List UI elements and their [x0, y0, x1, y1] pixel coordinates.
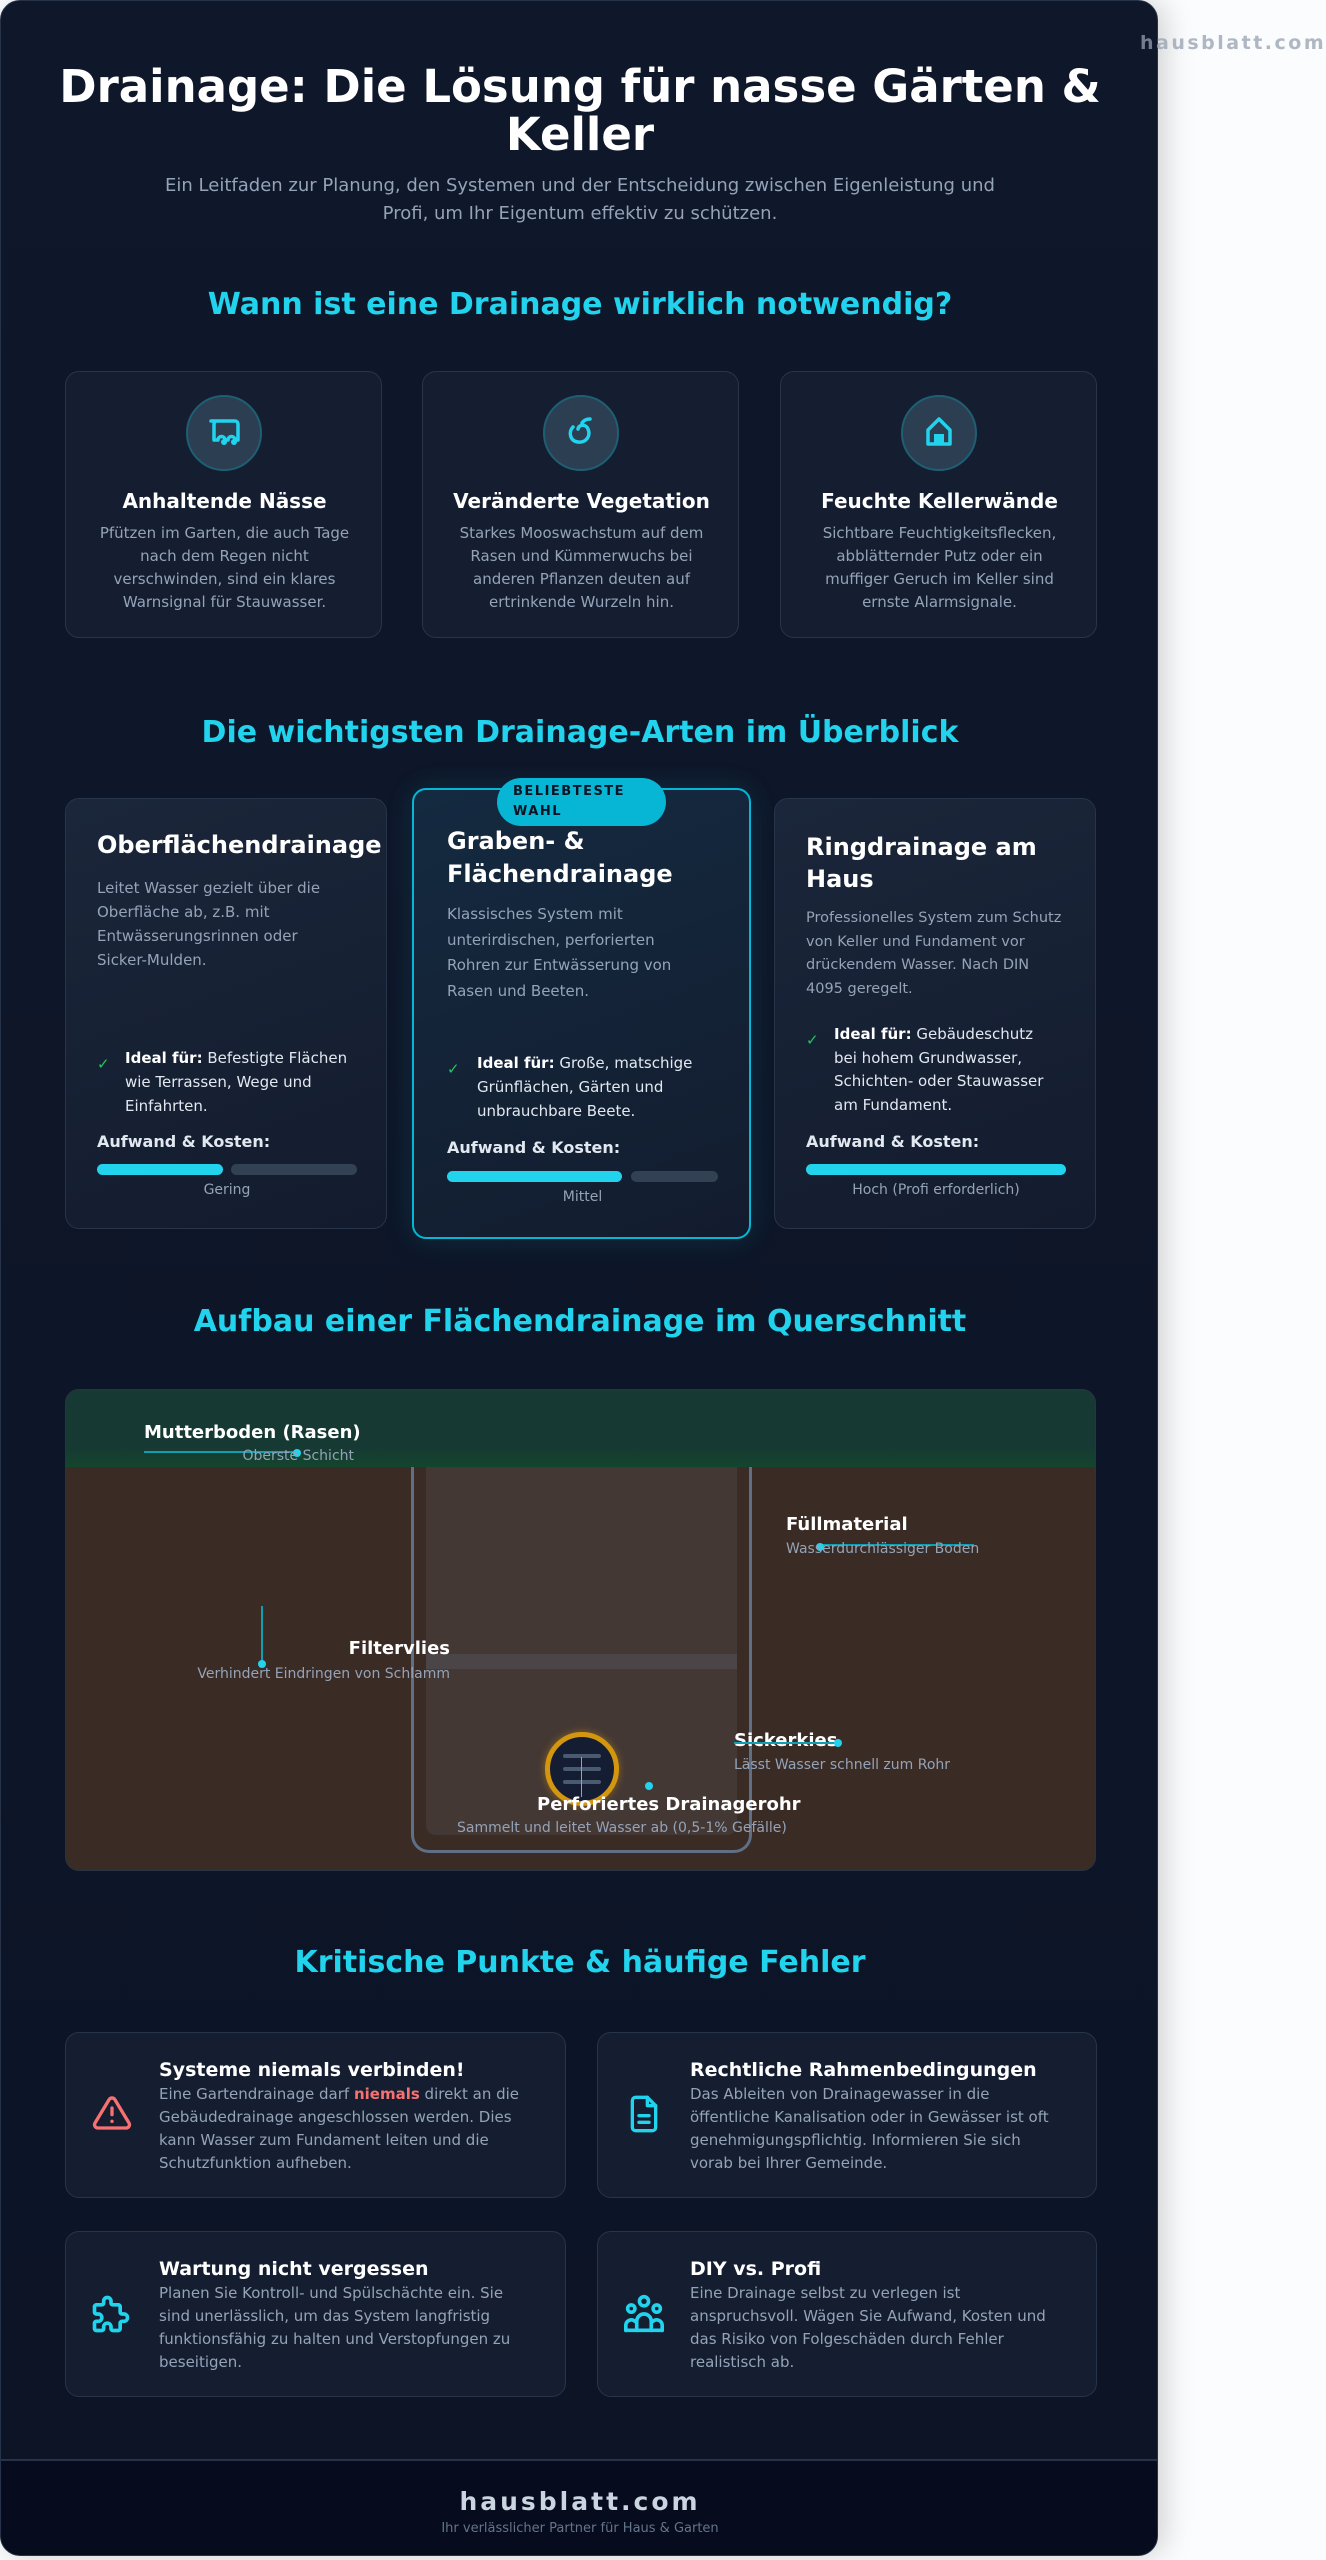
point text: Das Ableiten von Drainagewasser in die öffentliche Kanalisation oder in Gewässer ist oft genehmigungspflichtig. Informieren Sie sich vorab bei Ihrer Gemeinde.: [690, 2085, 1049, 2172]
trench: [411, 1467, 752, 1853]
ideal for: Ideal für: Befestigte Flächen wie Terrassen, Wege und Einfahrten.: [125, 1049, 347, 1115]
panel: Graben- & Flächendrainage (featured): [412, 788, 751, 1239]
icon: warning: [92, 2096, 132, 2130]
footer: [1, 2459, 1159, 2560]
footer tagline: Ihr verlässlicher Partner für Haus & Garten: [441, 2521, 719, 2536]
point title: Systeme niemals verbinden!: [159, 2059, 465, 2081]
panel: Wartung: [65, 2231, 566, 2397]
label: Drainagerohr: Perforiertes Drainagerohr: [537, 1794, 801, 1815]
label: Mutterboden: Mutterboden (Rasen): [144, 1422, 361, 1443]
cost bar: Hoch (Profi erforderlich): [852, 1182, 1020, 1198]
cost bar: [806, 1164, 1066, 1198]
panel: Oberflächendrainage: [65, 798, 387, 1229]
layer: topsoil: [66, 1390, 1097, 1467]
point title: Wartung nicht vergessen: [159, 2258, 429, 2280]
type title: Oberflächendrainage: [97, 831, 382, 859]
subtitle: Ein Leitfaden zur Planung, den Systemen und der Entscheidung zwischen Eigenleistung und Profi, um Ihr Eigentum effektiv zu schützen.: [165, 175, 995, 224]
label: Füllmaterial: Wasserdurchlässiger Boden: [786, 1541, 979, 1557]
type title: Ringdrainage am Haus: [806, 833, 1037, 893]
cost bar: Mittel: [563, 1189, 602, 1205]
label: Sickerkies: Lässt Wasser schnell zum Rohr: [734, 1757, 950, 1773]
label: Filtervlies: Verhindert Eindringen von Schlamm: [197, 1666, 450, 1682]
card title: Feuchte Kellerwände: [821, 489, 1058, 513]
label: Mutterboden: [144, 1422, 361, 1464]
panel: anhaltende Nässe: [65, 371, 382, 638]
point title: DIY vs. Profi: [690, 2258, 821, 2280]
ideal for: Ideal für: Gebäudeschutz bei hohem Grundwasser, Schichten- oder Stauwasser am Fundament.: [834, 1025, 1043, 1114]
cost bar: [97, 1164, 357, 1198]
badge: [497, 778, 666, 826]
badge: BELIEBTESTE: [513, 784, 625, 799]
type title: Graben- & Flächendrainage: [447, 827, 673, 888]
cost bar: Gering: [204, 1182, 250, 1198]
diagram: cross section: [65, 1389, 1096, 1871]
label: Drainagerohr: Sammelt und leitet Wasser ab (0,5-1% Gefälle): [457, 1820, 787, 1836]
panel: Rechtliche Rahmenbedingungen: [597, 2032, 1097, 2198]
title: Drainage: Die Lösung für nasse Gärten & Keller: [59, 60, 1101, 161]
icon: drainage pipe: [545, 1732, 619, 1806]
icon: document: [630, 2096, 658, 2132]
card text: Pfützen im Garten, die auch Tage nach dem Regen nicht verschwinden, sind ein klares Warnsignal für Stauwasser.: [100, 524, 349, 611]
panel: Ringdrainage: [774, 798, 1096, 1229]
panel: DIY vs. Profi: [597, 2231, 1097, 2397]
label: Füllmaterial: Füllmaterial: [786, 1514, 908, 1535]
cost bar: [447, 1171, 718, 1205]
layer: filter fleece: [426, 1654, 737, 1669]
point text: Eine Gartendrainage darf niemals direkt an die Gebäudedrainage angeschlossen werden. Dies kann Wasser zum Fundament leiten und die Schutzfunktion aufheben.: [159, 2085, 519, 2172]
ideal for: Ideal für: Große, matschige Grünflächen, Gärten und unbrauchbare Beete.: [477, 1054, 692, 1120]
card text: Sichtbare Feuchtigkeitsflecken, abblätternder Putz oder ein muffiger Geruch im Keller sind ernste Alarmsignale.: [823, 524, 1056, 611]
card title: Veränderte Vegetation: [453, 489, 710, 513]
badge: WAHL: [513, 804, 562, 819]
label: Sickerkies: Sickerkies: [734, 1730, 837, 1751]
label: Füllmaterial: [786, 1514, 979, 1557]
card text: Starkes Mooswachstum auf dem Rasen und Kümmerwuchs bei anderen Pflanzen deuten auf ertrinkende Wurzeln hin.: [460, 524, 703, 611]
icon: plant: [543, 395, 619, 471]
ideal for: ✓: [97, 1055, 110, 1073]
label: Sickerkies: [734, 1730, 950, 1773]
icon: puddle: [186, 395, 262, 471]
icon: people: [624, 2294, 664, 2332]
watermark: hausblatt.com: [1140, 32, 1326, 54]
label: Filtervlies: [197, 1606, 450, 1682]
label: Mutterboden: Oberste Schicht: [242, 1448, 354, 1464]
type description: Leitet Wasser gezielt über die Oberfläche ab, z.B. mit Entwässerungsrinnen oder Sicker-Mulden.: [97, 879, 320, 969]
icon: puzzle: [92, 2296, 130, 2332]
ideal for: ✓: [806, 1031, 819, 1049]
point title: Rechtliche Rahmenbedingungen: [690, 2059, 1037, 2081]
panel: Systeme niemals verbinden: [65, 2032, 566, 2198]
point text: Eine Drainage selbst zu verlegen ist anspruchsvoll. Wägen Sie Aufwand, Kosten und das Risiko von Folgeschäden durch Fehler realistisch ab.: [690, 2284, 1046, 2371]
cost label: Aufwand & Kosten:: [447, 1138, 620, 1157]
point text: Planen Sie Kontroll- und Spülschächte ein. Sie sind unerlässlich, um das System langfristig funktionsfähig zu halten und Verstopfungen zu beseitigen.: [159, 2284, 510, 2371]
panel: vegetation: [422, 371, 739, 638]
heading: cross section: Aufbau einer Flächendrainage im Querschnitt: [194, 1304, 966, 1339]
heading: when necessary: Wann ist eine Drainage wirklich notwendig?: [208, 287, 952, 322]
type description: Klassisches System mit unterirdischen, perforierten Rohren zur Entwässerung von Rasen und Beeten.: [447, 905, 671, 1000]
cost label: Aufwand & Kosten:: [806, 1132, 979, 1151]
panel: basement walls: [780, 371, 1097, 638]
heading: critical points: Kritische Punkte & häufige Fehler: [294, 1945, 866, 1980]
type description: Professionelles System zum Schutz von Keller und Fundament vor drückendem Wasser. Nach DIN 4095 geregelt.: [806, 910, 1061, 996]
footer brand: hausblatt.com: [459, 2487, 701, 2516]
heading: types: Die wichtigsten Drainage-Arten im Überblick: [202, 715, 958, 750]
label: Filtervlies: Filtervlies: [349, 1638, 450, 1659]
icon: house: [901, 395, 977, 471]
card title: Anhaltende Nässe: [122, 489, 327, 513]
ideal for: ✓: [447, 1060, 460, 1078]
label: Drainagerohr: [457, 1782, 801, 1836]
cost label: Aufwand & Kosten:: [97, 1132, 270, 1151]
